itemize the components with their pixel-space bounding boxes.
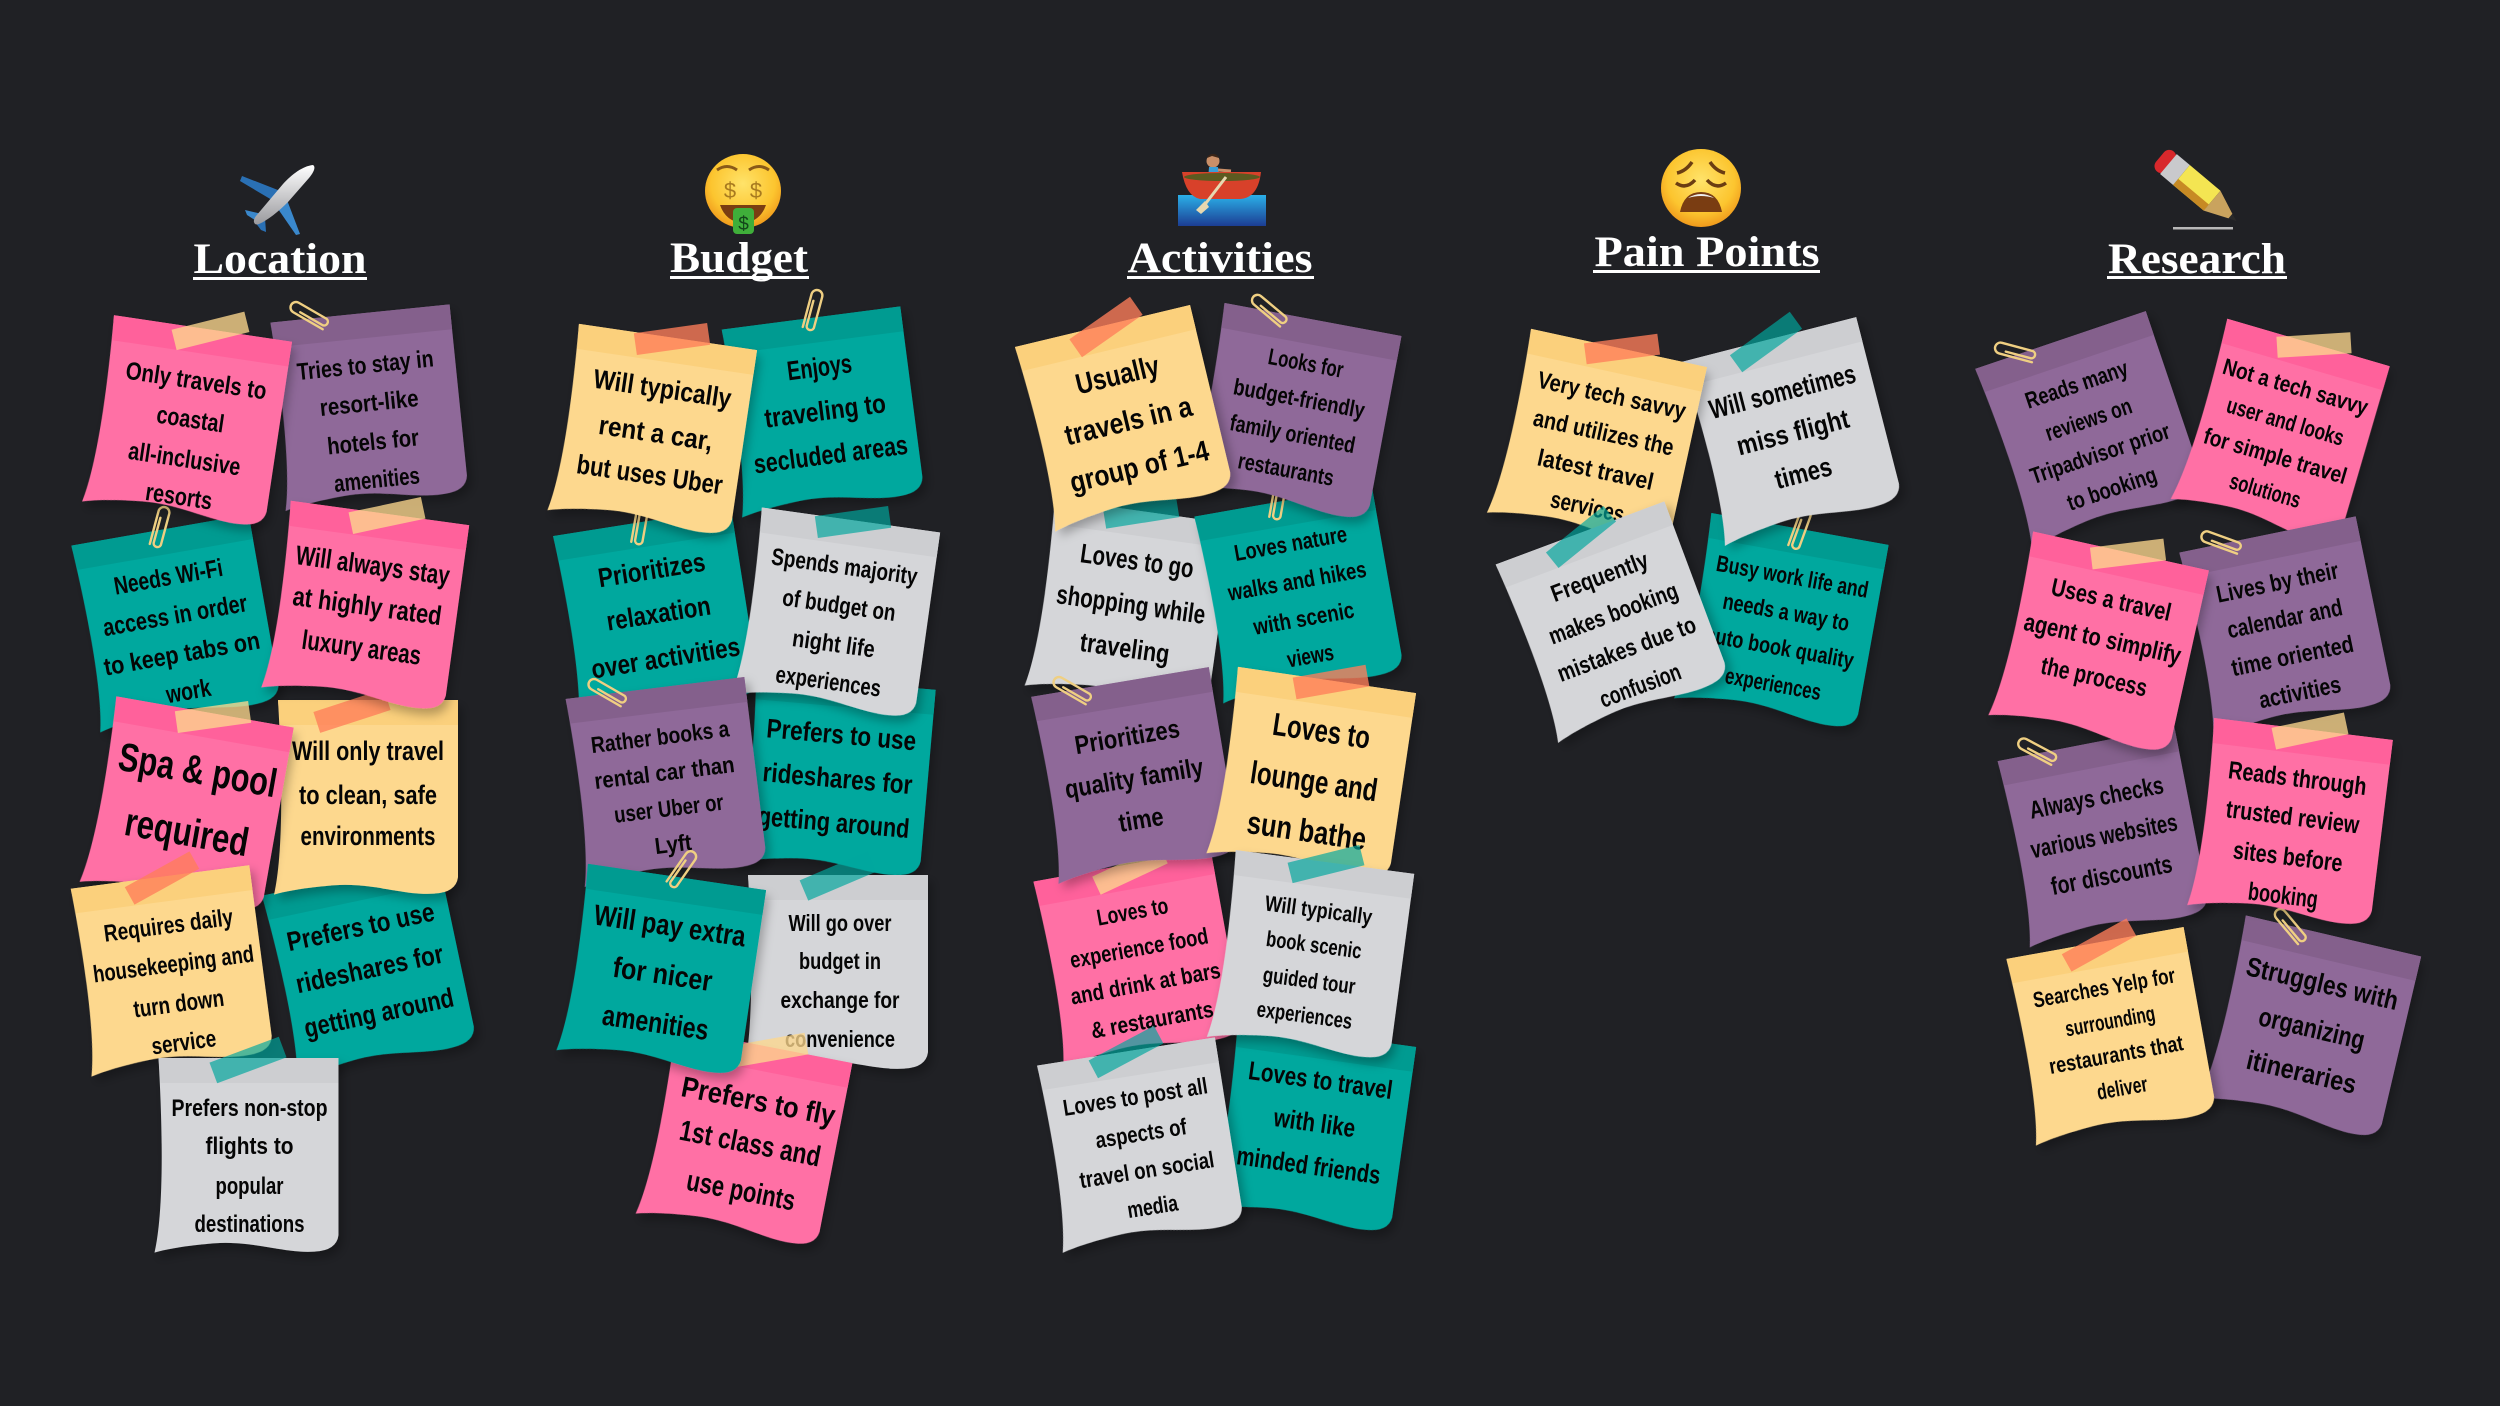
panel: Budget column [547,154,940,1249]
note: Always checks various websites: Always checks [2027,771,2166,825]
note: Very tech savvy: latest travel [1535,445,1656,496]
panel: Pain Points column [1487,149,1903,743]
note: Needs Wi-Fi: work [163,674,213,709]
note: Rather books a rental car: Rather books a [589,715,731,758]
note: Prefers non-stop flights: Prefers non-stop [172,1095,328,1122]
icon: paper clip [288,300,329,330]
note: Prefers non-stop flights: flights to [206,1133,294,1160]
note: Loves nature walks and hikes: walks and hikes [1225,556,1368,606]
tape [125,851,199,905]
note: Loves to post all aspects of travel on social media: media [1125,1189,1180,1223]
tape [1584,334,1660,364]
note: Prioritizes quality family time: time [1116,801,1166,838]
icon: paper clip [1788,508,1812,550]
note: Frequently makes booking mistakes: makes booking [1545,577,1682,650]
note: Busy work life: auto book quality [1704,621,1856,673]
note: Very tech savvy: services [1548,486,1627,529]
note: Always checks various websites [1994,727,2210,947]
note: Reads through trusted review sites: booking [2247,878,2319,914]
note: Requires daily housekeeping: housekeeping and [91,941,256,988]
tape [313,689,391,733]
note: Will go over budget in exchange for convenience: convenience [785,1026,895,1052]
tape [2272,713,2348,749]
note: Will typically book scenic guided tour experiences: book scenic [1265,926,1363,964]
icon: money-mouth face: $ [750,178,762,203]
note: Reads many reviews on Tripadvisor [1971,311,2206,549]
note: Reads many reviews on Tripadvisor: Reads many [2022,355,2132,414]
note: Spa & pool required [80,696,294,914]
note: Frequently makes booking mistakes: Frequently [1547,547,1653,608]
tape [1092,845,1168,895]
icon: paper clip [586,677,627,707]
note: Struggles with organizing itineraries: organizing [2256,1002,2368,1055]
tape [1546,506,1616,568]
note: Enjoys traveling to secluded areas: Enjoys [785,348,854,386]
note: Loves to lounge and sun bathe: Loves to [1270,706,1373,756]
note: Reads many reviews on Tripadvisor: reviews on [2042,393,2135,446]
icon: weary face [1661,149,1741,227]
icon: money-mouth face [705,154,781,235]
tape [1730,312,1802,372]
note: Prefers to use rideshares: Prefers to use [284,897,437,957]
note: Will only travel to clean, safe environments: to clean, safe [299,780,437,810]
icon: paper clip [1051,675,1092,705]
tape [2062,918,2136,972]
note: Requires daily housekeeping: Requires daily [102,904,235,948]
note: Usually travels in a group of 1-4: Usually [1072,350,1163,401]
note: Always checks various websites: for discounts [2049,850,2175,901]
note: Requires daily housekeeping: service [150,1025,218,1060]
note: Searches Yelp for surrounding restaurants: restaurants that [2047,1030,2186,1079]
panel: Research column [1971,147,2421,1146]
note: Prefers non-stop flights: popular [216,1173,284,1200]
note: Searches Yelp for surrounding restaurants: deliver [2095,1071,2150,1105]
note: Spa & pool required: Spa & pool [115,735,280,806]
note: Usually travels in a group of 1-4 [1011,297,1234,532]
tape [2276,332,2352,358]
note: Needs Wi-Fi: to keep tabs on [102,627,262,682]
panel: Activities column [1011,154,1416,1253]
note: Searches Yelp for surrounding restaurants: Searches Yelp for [2031,962,2177,1013]
note: Loves to travel with like minded friends [1208,1021,1416,1234]
note: Lives by their calendar: calendar and [2225,594,2345,644]
note: Will pay extra for nicer amenities: for nicer [611,952,714,998]
note: Spends majority of budget on night life [732,506,940,720]
note: Loves to experience food and drink: experience food [1068,922,1210,973]
icon: pencil [2152,147,2245,231]
note: Rather books a rental car: rental car than [593,751,736,794]
note: Will always stay at highly rated luxury areas: at highly rated [291,581,444,631]
note: Prioritizes quality family time: Prioritizes [1072,713,1182,760]
note: Prefers to use rideshares: getting around [301,982,456,1043]
note: Loves to experience food and drink: and drink at bars [1068,957,1223,1010]
note: Not a tech savvy user: solutions [2227,468,2304,513]
note: Tries to stay in resort-like hotels: resort-like [319,385,420,422]
tape [1288,845,1364,883]
note: Lives by their calendar: Lives by their [2214,557,2341,609]
note: Requires daily housekeeping: turn down [132,985,226,1023]
note: Very tech savvy: and utilizes the [1531,405,1676,462]
note: Only travels to coastal all-inclusive resorts: coastal [155,401,226,439]
note: Will pay extra for nicer amenities: amenities [600,1000,711,1047]
note: Prioritizes relaxation over activities: over activities [589,631,742,685]
icon: paper clip [666,849,698,889]
note: Looks for budget-friendly family oriented restaurants: restaurants [1236,447,1336,491]
heading: Activities: Activities [1128,235,1312,282]
note: Will only travel to clean, safe environments [274,689,458,895]
icon: airplane [240,165,314,235]
note: Struggles with organizing itineraries: itineraries [2244,1045,2359,1100]
note: Not a tech savvy user: Not a tech savvy [2220,353,2371,420]
heading: Budget: Budget [670,235,809,282]
note: Only travels to coastal all-inclusive resorts: all-inclusive [127,437,242,481]
note: Loves to go shopping while traveling [1025,495,1233,711]
note: Will sometimes miss flight times [1678,312,1903,546]
note: Prefers to use rideshares (budget): Prefers to use [765,713,917,756]
heading: Location: Location [194,236,367,283]
note: Lives by their calendar: time oriented [2229,631,2356,682]
note: Loves to post all aspects of travel on social media: Loves to post all [1061,1072,1209,1121]
icon: money-mouth face: $ [738,214,749,235]
note: Reads many reviews on Tripadvisor: Tripadvisor prior [2027,418,2173,489]
note: Prefers to use rideshares [258,858,477,1081]
icon: paper clip [2200,530,2242,554]
note: Loves to go shopping while traveling: traveling [1078,627,1171,669]
note: Loves to lounge and sun bathe: lounge and [1248,754,1380,808]
note: Prioritizes quality family time [1027,667,1240,884]
note: Loves to travel with like minded friends: minded friends [1235,1140,1383,1190]
note: Not a tech savvy user: for simple travel [2201,423,2350,489]
note: Will go over budget in exchange for convenience: exchange for [780,987,900,1013]
tape [2090,539,2166,569]
note: Reads through trusted review sites [2187,713,2393,928]
note: Prefers to fly 1st class and use points [636,1028,852,1249]
note: Prefers to fly 1st class and use points: use points [684,1165,798,1217]
note: Loves to lounge and sun bathe [1206,665,1416,880]
note: Will typically book scenic guided tour experiences: experiences [1255,996,1354,1034]
note: Very tech savvy [1487,328,1707,552]
note: Lives by their calendar: activities [2257,671,2343,714]
tape [1069,297,1143,357]
note: Prefers non-stop flights: destinations [194,1211,304,1238]
note: Tries to stay in resort-like hotels: amenities [333,462,421,498]
note: Searches Yelp for surrounding restaurants: surrounding [2063,1001,2157,1041]
note: Searches Yelp for surrounding restaurants [2002,918,2217,1146]
note: Reads many reviews on Tripadvisor: to booking [2064,461,2160,516]
note: Only travels to coastal all-inclusive resorts [82,312,292,529]
note: Prioritizes relaxation over activities [549,503,760,723]
note: Loves nature walks and hikes: with scenic [1250,597,1356,640]
note: Loves to post all aspects of travel on social media: aspects of [1093,1113,1189,1153]
tape [209,1037,287,1083]
note: Spends majority of budget on night life: experiences [774,661,883,703]
note: Will typically book scenic guided tour experiences: guided tour [1261,962,1357,999]
note: Loves nature walks and hikes [1190,478,1404,703]
note: Usually travels in a group of 1-4: group of 1-4 [1067,435,1212,499]
icon: paper clip [2273,907,2307,945]
note: Will go over budget in exchange for convenience: budget in [799,948,881,974]
note: Needs Wi-Fi: Needs Wi-Fi [112,554,225,601]
note: Reads through trusted review sites: sites before [2231,836,2344,878]
note: Frequently makes booking mistakes [1492,501,1730,743]
note: Reads through trusted review sites: Reads through [2227,756,2368,801]
note: Prefers to use rideshares (budget): rideshares for [762,757,914,800]
note: Busy work life [1674,508,1889,731]
note: Will always stay at highly rated luxury areas: Will always stay [294,540,452,591]
tape [815,506,891,538]
tape [732,1033,808,1067]
note: Looks for budget-friendly family oriented restaurants: budget-friendly [1232,373,1367,423]
icon: person rowing boat [1178,154,1266,226]
note: Prioritizes quality family time: quality family [1063,752,1206,804]
note: Busy work life: needs a way to [1721,588,1851,636]
note: Loves to travel with like minded friends: Loves to travel [1247,1055,1394,1105]
note: Will sometimes miss flight times: miss flight [1733,404,1852,461]
note: Loves to lounge and sun bathe: sun bathe [1245,804,1369,857]
note: Very tech savvy: Very tech savvy [1535,367,1689,425]
tape [1089,1026,1163,1078]
note: Reads through trusted review sites: trusted review [2224,795,2361,839]
note: Prioritizes relaxation over activities: relaxation [604,591,713,637]
note: Struggles with organizing itineraries [2199,907,2421,1141]
tape [349,497,425,534]
note: Frequently makes booking mistakes: confusion [1596,659,1685,714]
note: Rather books a rental car: Lyft [653,829,693,859]
tape [172,312,249,350]
note: Only travels to coastal all-inclusive resorts: resorts [144,478,214,516]
note: Always checks various websites: various websites [2028,808,2180,864]
icon: paper clip [1250,293,1288,327]
note: Uses a travel agent to simplify the process: agent to simplify [2021,608,2184,670]
tape [1293,665,1369,699]
note: Enjoys traveling to secluded areas: secluded areas [752,430,910,479]
note: Will go over budget in exchange for convenience [744,851,928,1070]
note: Prefers to fly 1st class and use points: Prefers to fly [679,1071,838,1133]
icon: paper clip [631,503,649,545]
note: Needs Wi-Fi: access in order [101,589,250,642]
note: Looks for budget-friendly family oriented restaurants: family oriented [1228,409,1357,458]
note: Uses a travel agent to simplify the process: Uses a travel [2049,573,2174,627]
note: Rather books a rental car [562,677,767,887]
note: Rather books a rental car: user Uber or [613,789,725,828]
note: Loves to post all aspects of travel on social media: travel on social [1078,1146,1216,1193]
note: Tries to stay in resort-like hotels: hotels for [326,424,420,460]
note: Enjoys traveling to secluded areas: traveling to [763,388,888,434]
note: Will typically rent a car, but uses Uber [547,323,757,537]
tape [800,851,876,901]
note: Needs Wi-Fi [67,506,281,732]
note: Prefers to use rideshares: rideshares for [293,939,446,999]
note: Prefers to use rideshares (budget): getting around [757,801,911,844]
note: Will always stay at highly rated luxury areas: luxury areas [300,625,423,671]
note: Will typically rent a car, but uses Uber: rent a car, [597,410,715,456]
icon: money-mouth face: $ [724,178,736,203]
tape [175,701,251,733]
heading: Research: Research [2108,236,2286,283]
note: Will only travel to clean, safe environments: environments [300,821,436,851]
note: Will typically book scenic guided tour experiences: Will typically [1263,891,1374,930]
note: Spends majority of budget on night life: night life [791,625,877,663]
note: Lives by their calendar [2175,516,2394,739]
note: Enjoys traveling to secluded areas [718,289,925,518]
heading: Pain Points: Pain Points [1594,229,1820,276]
note: Prefers to fly 1st class and use points: 1st class and [677,1115,823,1173]
note: Frequently makes booking mistakes: mistakes due to [1554,611,1700,688]
note: Usually travels in a group of 1-4: travels in a [1062,391,1196,452]
note: Looks for budget-friendly family oriented restaurants: Looks for [1266,343,1346,383]
panel: Location column [67,165,477,1253]
note: Busy work life: experiences [1723,662,1823,705]
note: Spends majority of budget on night life: Spends majority [770,543,920,591]
note: Busy work life: Busy work life and [1714,550,1871,603]
note: Loves to post all aspects of travel on social media [1033,1026,1244,1253]
note: Tries to stay in resort-like hotels: Tries to stay in [296,345,435,386]
note: Loves to go shopping while traveling: Loves to go [1079,538,1196,584]
note: Struggles with organizing itineraries: Struggles with [2243,951,2401,1016]
icon: paper clip [2016,737,2057,765]
note: Loves nature walks and hikes: views [1285,639,1336,672]
note: Not a tech savvy user [2171,318,2390,548]
note: Spa & pool required: required [121,800,252,865]
note: Will typically book scenic guided tour experiences [1207,845,1414,1061]
note: Prefers to use rideshares (budget) [736,674,936,878]
note: Prefers non-stop flights [154,1037,338,1253]
note: Will only travel to clean, safe environments: Will only travel [292,736,444,766]
tape [1103,495,1179,529]
note: Loves to go shopping while traveling: shopping while [1055,579,1207,630]
note: Prioritizes relaxation over activities: Prioritizes [596,547,707,593]
note: Uses a travel agent to simplify the process: the process [2038,652,2150,703]
note: Not a tech savvy user: user and looks [2224,392,2347,451]
note: Requires daily housekeeping [67,851,274,1077]
icon: paper clip [1994,341,2036,363]
note: Loves to experience food and drink: & restaurants [1089,996,1215,1043]
note: Will always stay at highly rated luxury areas [261,497,469,712]
note: Only travels to coastal all-inclusive resorts: Only travels to [124,357,268,405]
note: Will typically rent a car, but uses Uber: but uses Uber [575,449,725,500]
note: Loves to experience food and drink: Loves to [1095,892,1170,931]
note: Loves to travel with like minded friends: with like [1271,1102,1357,1143]
note: Tries to stay in resort-like hotels [266,300,469,511]
note: Will typically rent a car, but uses Uber: Will typically [591,364,733,414]
tape [634,323,710,355]
icon: paper clip [1269,478,1287,520]
note: Will sometimes miss flight times: times [1771,451,1835,495]
note: Loves to experience food and drink [1030,845,1244,1068]
note: Will pay extra for nicer amenities: Will pay extra [592,899,748,954]
note: Will sometimes miss flight times: Will sometimes [1706,359,1859,425]
note: Spends majority of budget on night life: of budget on [781,584,897,627]
note: Looks for budget-friendly family oriented restaurants [1186,293,1401,522]
note: Will go over budget in exchange for convenience: Will go over [788,910,892,936]
note: Uses a travel agent to simplify the process [1988,531,2209,755]
note: Will pay extra for nicer amenities [556,849,766,1077]
icon: paper clip [802,289,824,331]
note: Loves nature walks and hikes: Loves nature [1232,521,1349,566]
icon: paper clip [149,506,171,548]
